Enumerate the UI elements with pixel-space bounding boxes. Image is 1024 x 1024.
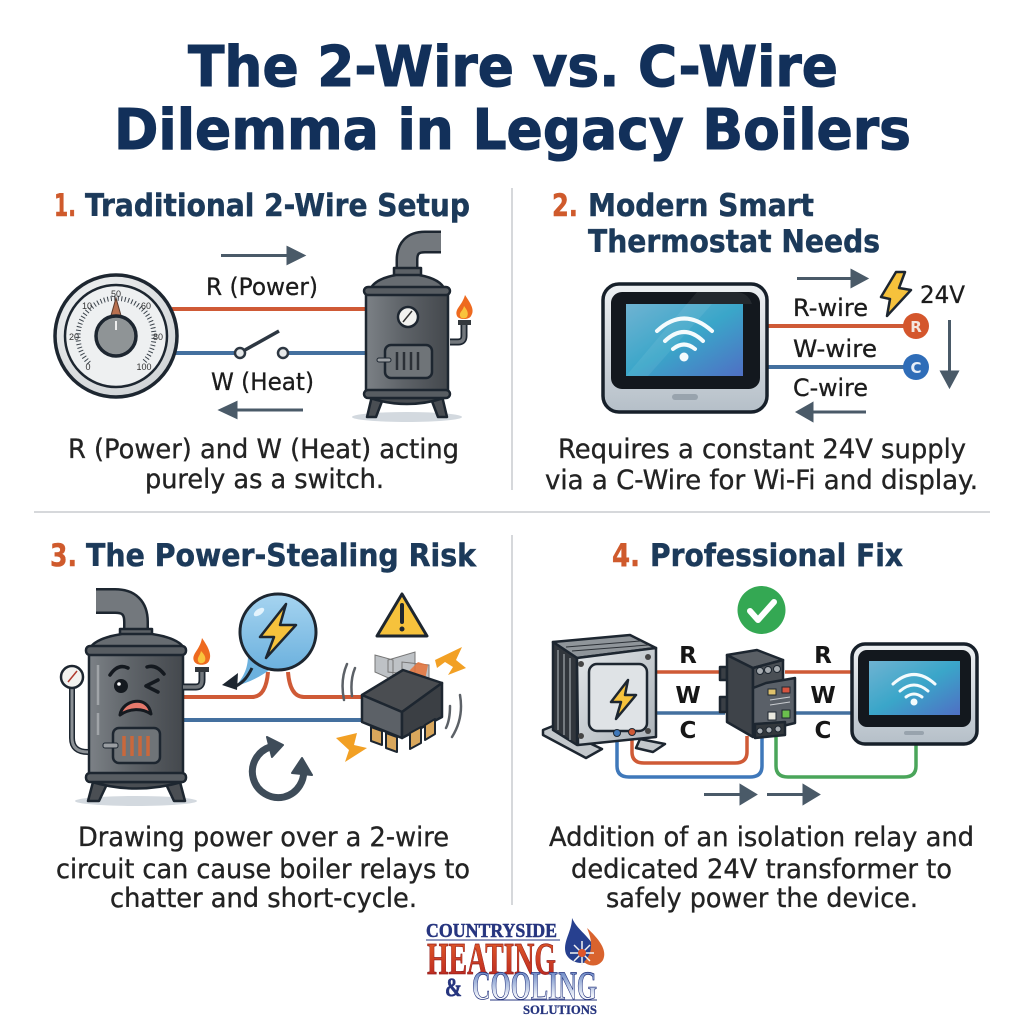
description 1 xyxy=(68,434,459,495)
wire labels left: C xyxy=(680,718,696,744)
description 4: safely power the device. xyxy=(606,883,918,914)
description 4: Addition of an isolation relay and xyxy=(549,822,974,853)
wire labels: W-wire xyxy=(793,335,877,363)
icon: transformer xyxy=(543,635,665,758)
icon: speech bubble with bolt xyxy=(222,594,316,690)
arrow: bottom xyxy=(798,404,866,420)
icon: boiler xyxy=(352,242,473,422)
wire labels left xyxy=(675,643,701,744)
wires with R and C terminals xyxy=(767,313,929,380)
logo: COUNTRYSIDE xyxy=(426,920,557,942)
title: Dilemma in Legacy Boilers xyxy=(114,98,911,163)
icon: isolation relay xyxy=(720,650,795,738)
arrow: down xyxy=(942,320,957,386)
heading 3: The Power-Stealing Risk xyxy=(86,538,477,574)
title: The 2-Wire vs. C-Wire xyxy=(188,35,838,100)
icon: analog thermostat: 10 xyxy=(82,301,92,311)
icon: lightning bolt xyxy=(881,272,911,316)
description 4: dedicated 24V transformer to xyxy=(571,854,952,885)
wires with switch xyxy=(172,309,366,358)
icon: analog thermostat: 80 xyxy=(153,332,163,342)
logo: & xyxy=(445,973,462,1002)
panel: power-stealing risk xyxy=(50,538,477,914)
heading 2: Thermostat Needs xyxy=(588,224,880,260)
icon: green check xyxy=(738,586,786,634)
icon: analog thermostat: 0 xyxy=(85,362,91,372)
arrow: W direction xyxy=(221,403,303,417)
wires with R and C terminals: C xyxy=(910,359,922,377)
icon: analog thermostat: 50 xyxy=(111,289,121,299)
wires xyxy=(183,672,364,720)
wire labels right: C xyxy=(815,718,831,744)
description 2: via a C-Wire for Wi-Fi and display. xyxy=(545,465,978,496)
icon: chattering relay xyxy=(336,647,466,762)
description 3: circuit can cause boiler relays to xyxy=(56,854,470,885)
logo: SOLUTIONS xyxy=(523,1002,597,1017)
arrow: R direction xyxy=(221,248,303,263)
wire labels right: R xyxy=(814,643,832,669)
description 2: Requires a constant 24V supply xyxy=(558,434,966,465)
wire labels left: W xyxy=(675,683,701,709)
heading 2 xyxy=(552,188,880,260)
icon: warning triangle xyxy=(377,594,427,636)
heading 4: Professional Fix xyxy=(650,538,903,574)
label 24V: 24V xyxy=(920,281,966,309)
description 3 xyxy=(56,822,470,914)
heading 2: Modern Smart xyxy=(588,188,814,224)
description 1: purely as a switch. xyxy=(145,464,384,495)
logo xyxy=(426,918,604,1017)
wires with R and C terminals: R xyxy=(910,318,922,336)
wire labels: C-wire xyxy=(793,374,868,402)
wire labels: R-wire xyxy=(793,294,868,322)
icon: smart thermostat xyxy=(603,284,767,412)
panel: traditional 2-wire setup xyxy=(54,188,473,495)
description 1: R (Power) and W (Heat) acting xyxy=(68,434,459,465)
label R power: R (Power) xyxy=(206,273,318,301)
logo: HEATING xyxy=(427,933,556,984)
icon: analog thermostat: 100 xyxy=(136,362,152,372)
icon: short-cycle arrows xyxy=(252,737,312,798)
icon: analog thermostat: 60 xyxy=(141,301,151,311)
label W heat: W (Heat) xyxy=(211,368,314,396)
wire labels right: W xyxy=(810,683,836,709)
icon: smart thermostat small xyxy=(852,644,977,744)
panel: professional fix xyxy=(543,538,977,914)
description 3: chatter and short-cycle. xyxy=(110,883,417,914)
wire labels right xyxy=(810,643,836,744)
arrow: top xyxy=(797,271,866,286)
heading 2: 2. xyxy=(552,188,578,224)
heading 4: 4. xyxy=(612,538,640,574)
title xyxy=(114,35,911,163)
icon: analog thermostat xyxy=(55,275,177,397)
icon: analog thermostat: 20 xyxy=(69,332,79,342)
logo: COOLING xyxy=(472,963,597,1008)
arrows: current direction xyxy=(704,786,818,803)
heading 3: 3. xyxy=(50,538,77,574)
heading 1: Traditional 2-Wire Setup xyxy=(85,188,470,224)
panel: modern smart thermostat needs xyxy=(545,188,978,496)
description 3: Drawing power over a 2-wire xyxy=(78,822,449,853)
description 2 xyxy=(545,434,978,496)
description 4 xyxy=(549,822,974,914)
heading 1: 1. xyxy=(54,188,76,224)
icon: sad boiler xyxy=(61,601,210,806)
wire labels xyxy=(793,294,877,402)
wire labels left: R xyxy=(679,643,697,669)
wires xyxy=(617,672,916,777)
